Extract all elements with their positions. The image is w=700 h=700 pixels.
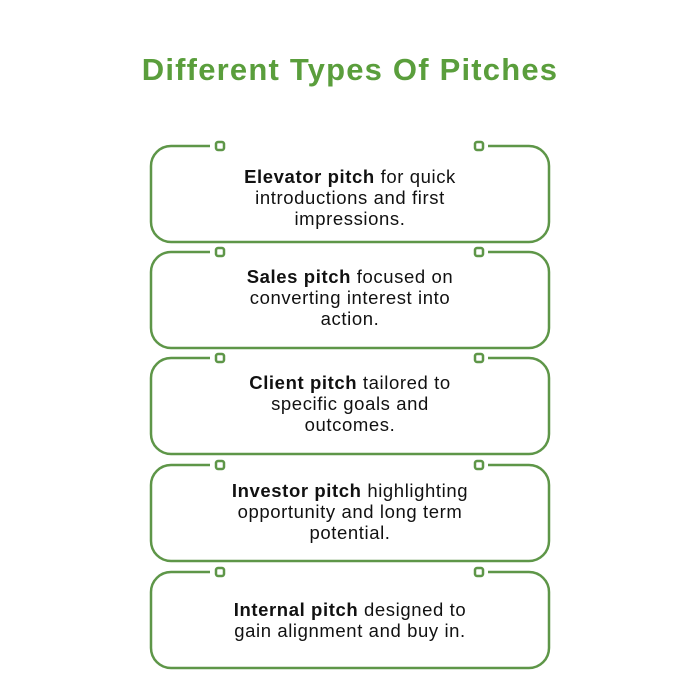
text: sales	[247, 266, 453, 329]
text: elevator: impressions.	[294, 208, 406, 229]
text: client: outcomes.	[305, 414, 395, 435]
text: investor: opportunity and long term	[238, 501, 462, 522]
text: investor	[232, 480, 468, 543]
text: sales: Sales pitch focused on	[247, 266, 453, 287]
frame 1	[151, 142, 549, 242]
text: elevator: introductions and first	[255, 187, 445, 208]
text: investor: potential.	[309, 522, 391, 543]
frame 5	[151, 568, 549, 668]
text: elevator	[244, 166, 456, 229]
frame 4	[151, 461, 549, 561]
frame 3	[151, 354, 549, 454]
title: Different Types Of Pitches	[142, 52, 558, 87]
text: investor: Investor pitch highlighting	[232, 480, 468, 501]
text: internal	[234, 599, 466, 641]
frame 2	[151, 248, 549, 348]
text: internal: Internal pitch designed to	[234, 599, 466, 620]
text: elevator: Elevator pitch for quick	[244, 166, 456, 187]
text: client	[249, 372, 451, 435]
text: internal: gain alignment and buy in.	[234, 620, 466, 641]
text: sales: action.	[321, 308, 379, 329]
text: client: Client pitch tailored to	[249, 372, 451, 393]
text: client: specific goals and	[271, 393, 429, 414]
text: sales: converting interest into	[250, 287, 450, 308]
